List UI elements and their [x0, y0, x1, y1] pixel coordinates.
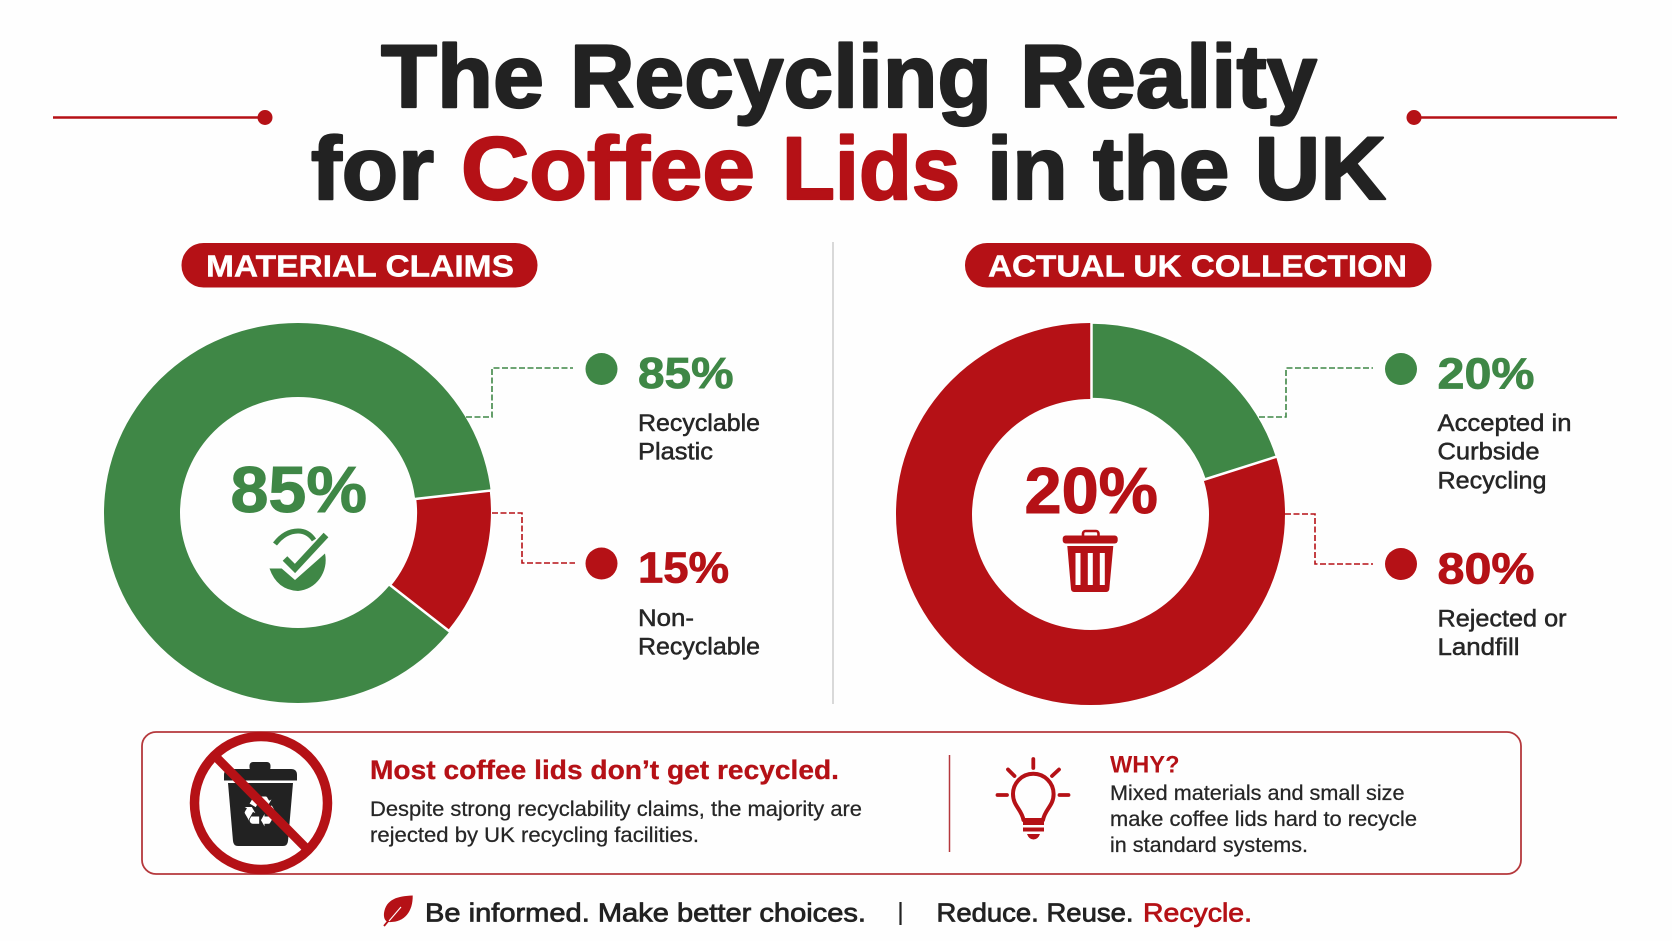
heading pill: material claims: [182, 243, 538, 288]
legend: non-recyclable: 15%: [638, 544, 729, 592]
title: in the UK: [987, 118, 1386, 218]
footer: [384, 896, 1252, 928]
legend: accepted in curbside recycling: Curbside: [1438, 438, 1540, 466]
donut chart: 20 percent accepted: [896, 322, 1285, 705]
legend: accepted in curbside recycling: Recycling: [1438, 468, 1546, 494]
legend: non-recyclable: [586, 544, 760, 660]
legend: recyclable plastic: Recyclable: [638, 410, 760, 437]
text block: why: in standard systems.: [1110, 834, 1308, 857]
title rule right: [1406, 110, 1617, 125]
heading pill: actual UK collection: ACTUAL UK COLLECTION: [988, 248, 1407, 284]
footer highlight: Recycle.: [1143, 898, 1252, 928]
legend: recyclable plastic: 85%: [638, 349, 734, 398]
legend: recyclable plastic: Plastic: [638, 438, 713, 466]
legend: non-recyclable: Recyclable: [638, 634, 760, 660]
legend: rejected or landfill: 80%: [1438, 544, 1534, 594]
donut chart: 85 percent recyclable: [104, 323, 492, 703]
title: Coffee: [461, 118, 755, 218]
text block: most lids not recycled: [370, 755, 862, 847]
heading pill: actual UK collection: [965, 243, 1432, 288]
legend connector: recyclable: [466, 368, 573, 417]
text block: most lids not recycled: rejected by UK recycling facilities.: [370, 824, 699, 847]
legend connector: non-recyclable: [492, 513, 575, 563]
title: [311, 26, 1386, 218]
text block: most lids not recycled: Most coffee lids don’t get recycled.: [370, 755, 839, 785]
footer text left: Be informed. Make better choices.: [425, 898, 866, 928]
text block: why: make coffee lids hard to recycle: [1110, 808, 1417, 831]
legend connector: accepted: [1259, 368, 1373, 417]
text block: why: WHY?: [1110, 752, 1180, 778]
text block: why: [1110, 752, 1417, 857]
title: Reality: [1020, 26, 1318, 126]
icon: check mark: [270, 531, 326, 591]
text block: why: Mixed materials and small size: [1110, 782, 1404, 805]
legend: rejected or landfill: Rejected or: [1438, 606, 1567, 632]
legend: recyclable plastic: [586, 349, 760, 466]
legend: rejected or landfill: Landfill: [1438, 634, 1520, 661]
legend: accepted in curbside recycling: Accepted in: [1438, 410, 1572, 437]
icon: leaf: [384, 896, 413, 926]
title: Recycling: [570, 26, 992, 126]
icon: no recycling bin: ♻: [241, 787, 279, 836]
donut centre value: 20%: [1024, 454, 1158, 527]
donut centre value: 85%: [230, 453, 367, 526]
legend: accepted in curbside recycling: 20%: [1438, 350, 1534, 398]
title: The: [381, 26, 544, 126]
panel: key takeaway: [142, 732, 1521, 874]
icon: light bulb: [998, 759, 1068, 840]
panel: material claims: [104, 243, 760, 703]
text block: most lids not recycled: Despite strong recyclability claims, the majority are: [370, 798, 862, 821]
legend: rejected or landfill: [1385, 544, 1567, 661]
legend connector: rejected: [1285, 514, 1373, 564]
title rule left: [53, 110, 272, 125]
legend: non-recyclable: Non-: [638, 605, 694, 632]
heading pill: material claims: MATERIAL CLAIMS: [206, 248, 514, 284]
legend: accepted in curbside recycling: [1385, 350, 1572, 494]
footer text right: Reduce. Reuse.: [936, 898, 1134, 928]
panel divider: [832, 242, 834, 704]
title: Lids: [782, 118, 960, 218]
icon: trash can: [1063, 531, 1118, 592]
panel: actual UK collection: [896, 243, 1572, 705]
title: for: [311, 118, 434, 218]
icon: no recycling bin: [194, 736, 328, 870]
